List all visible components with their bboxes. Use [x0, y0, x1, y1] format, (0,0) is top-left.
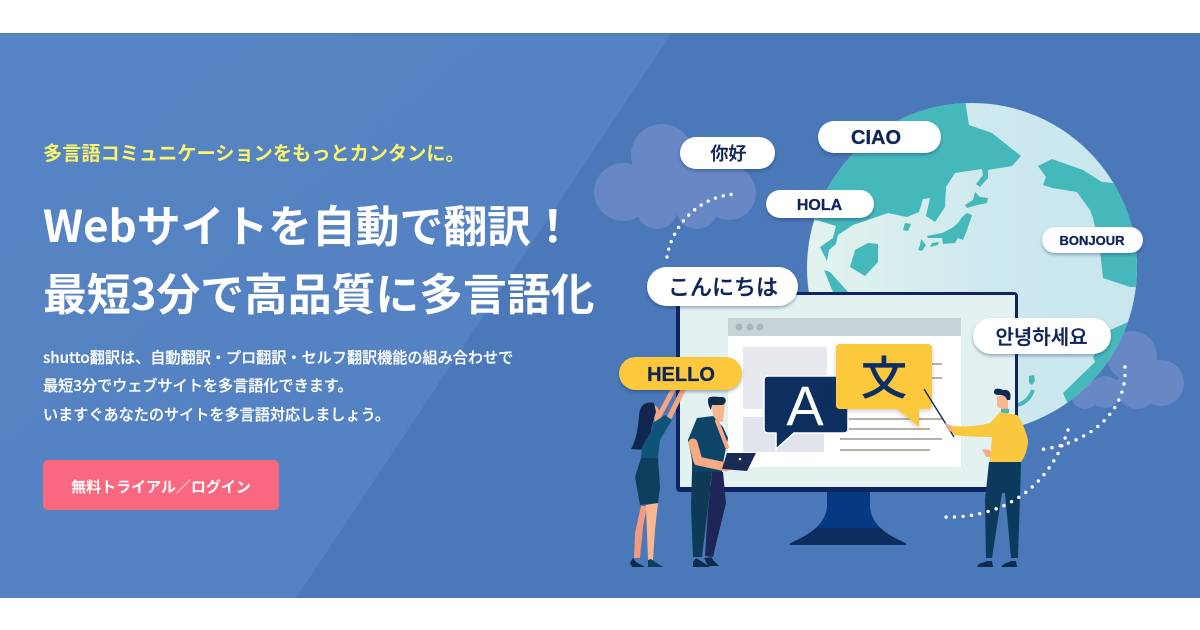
bubble: こんにちは	[647, 267, 798, 306]
browser dots	[736, 324, 764, 330]
button: trial login: 無料トライアル／ログイン	[71, 476, 251, 497]
bubble: BONJOUR: BONJOUR	[1059, 233, 1125, 248]
bubble: 안녕하세요	[973, 318, 1111, 354]
monitor	[676, 292, 1018, 545]
land: lower right crescent	[1063, 322, 1128, 402]
body text: 最短3分でウェブサイトを多言語化できます。	[43, 374, 353, 396]
man with laptop	[688, 397, 756, 567]
body text	[43, 346, 513, 425]
dotted path right lower	[940, 430, 1068, 517]
globe	[807, 103, 1137, 425]
woman	[630, 386, 685, 567]
speech bubble 文	[836, 342, 932, 427]
speech bubble 文: 文	[861, 342, 907, 407]
body text: shutto翻訳は、自動翻訳・プロ翻訳・セルフ翻訳機能の組み合わせで	[43, 346, 513, 368]
cloud left	[594, 124, 756, 229]
button: trial login	[43, 460, 279, 510]
illustration	[594, 103, 1184, 567]
bubble: HOLA	[766, 190, 874, 218]
eyebrow tagline: 多言語コミュニケーションをもっとカンタンに。	[43, 138, 465, 166]
text lines	[840, 364, 942, 450]
bubble: HELLO: HELLO	[647, 364, 715, 386]
land: eurasia	[800, 100, 1021, 261]
bubble: CIAO	[818, 121, 941, 153]
bubble: HOLA: HOLA	[797, 197, 843, 214]
bubble: HELLO	[619, 357, 742, 390]
bubble: こんにちは: こんにちは	[668, 270, 778, 302]
cloud right	[1071, 331, 1184, 409]
dotted path right upper	[1037, 367, 1125, 450]
headline: 最短3分で高品質に多言語化	[43, 259, 594, 323]
land: islands	[824, 192, 988, 292]
speech bubble A: A	[786, 374, 824, 437]
dotted path left	[667, 194, 737, 257]
monitor stand	[790, 490, 906, 545]
speech bubble A	[764, 374, 848, 449]
bubble: 안녕하세요: 안녕하세요	[996, 321, 1088, 350]
bubble: BONJOUR	[1042, 227, 1143, 253]
bubble: 你好	[680, 137, 775, 169]
land: americas	[1038, 159, 1145, 287]
headline: Webサイトを自動で翻訳！	[43, 191, 575, 255]
figure on globe arm	[1018, 375, 1035, 405]
bubble: CIAO: CIAO	[851, 127, 901, 149]
man with pointer	[924, 389, 1028, 567]
content blocks	[743, 347, 827, 409]
headline	[43, 191, 594, 323]
bubble: 你好: 你好	[710, 140, 746, 166]
body text: いますぐあなたのサイトを多言語対応しましょう。	[43, 403, 390, 425]
browser window	[728, 318, 961, 467]
monitor frame	[676, 292, 1018, 492]
